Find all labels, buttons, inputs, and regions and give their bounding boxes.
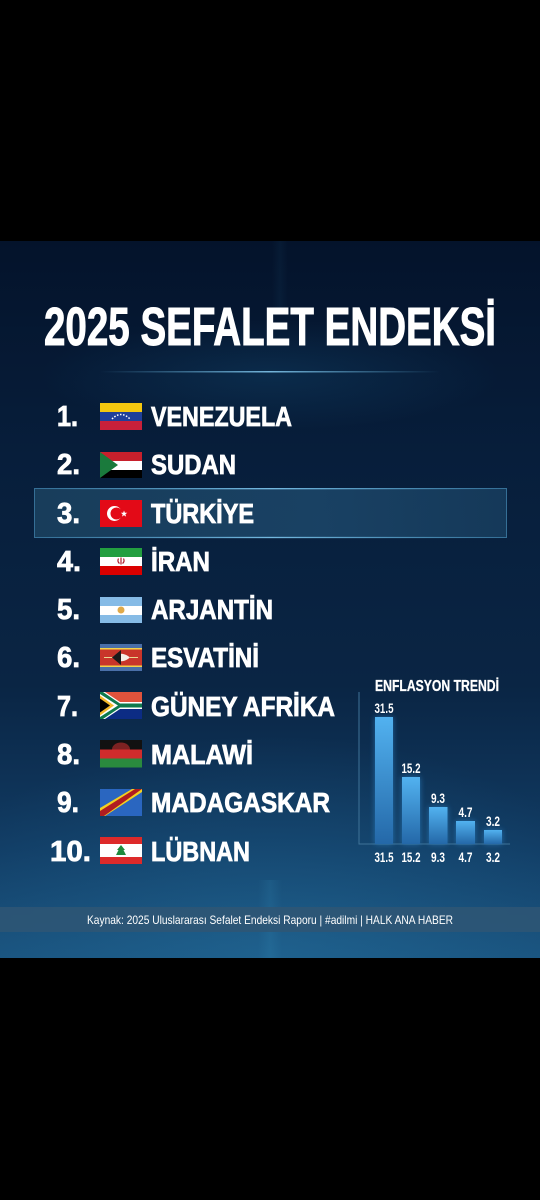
axis labels xyxy=(374,850,500,865)
flag: Güney Afrika xyxy=(100,692,142,719)
row 4: İran: 4. xyxy=(57,546,81,578)
row 5: Arjantin: 5. xyxy=(57,594,80,626)
flag: Sudan xyxy=(100,452,142,478)
row 8: Malawi: 8. xyxy=(57,739,80,771)
row 3: Türkiye: 3. xyxy=(57,498,80,530)
row 3: Türkiye xyxy=(57,498,254,530)
axis labels: 9.3 xyxy=(431,850,445,865)
row 2: Sudan: 2. xyxy=(57,449,80,481)
name: Arjantin: ARJANTİN xyxy=(151,594,273,625)
chart title: ENFLASYON TRENDİ xyxy=(375,677,499,695)
flag: Lübnan xyxy=(100,837,142,864)
bar value labels: 15.2 xyxy=(402,761,420,776)
bar value labels: 4.7 xyxy=(458,805,472,820)
flag: Madagaskar xyxy=(100,789,142,816)
row 5: Arjantin xyxy=(57,594,273,626)
flag: Esvatini xyxy=(100,644,142,671)
bar value labels: 9.3 xyxy=(431,791,445,806)
row 8: Malawi xyxy=(57,739,253,771)
name: Madagaskar: MADAGASKAR xyxy=(151,787,330,818)
highlight box: Türkiye row xyxy=(34,488,507,538)
bar value labels xyxy=(374,701,500,829)
flag: Türkiye xyxy=(100,500,142,527)
row 1: Venezuela xyxy=(57,401,292,433)
bars xyxy=(375,717,502,844)
row 2: Sudan xyxy=(57,449,236,481)
chart axes xyxy=(359,692,510,844)
axis labels: 15.2 xyxy=(402,850,420,865)
row 4: İran xyxy=(57,546,210,578)
row 10: Lübnan: 10. xyxy=(50,836,91,868)
row 10: Lübnan xyxy=(50,836,250,868)
name: Güney Afrika: GÜNEY AFRİKA xyxy=(151,691,335,722)
title underline glow xyxy=(100,371,440,372)
name: Lübnan: LÜBNAN xyxy=(151,836,250,867)
source bar: Kaynak: 2025 Uluslararası Sefalet Endeksi Raporu | #adilmi | HALK ANA HABER xyxy=(87,913,453,927)
name: Venezuela: VENEZUELA xyxy=(151,401,292,432)
name: İran: İRAN xyxy=(151,546,210,577)
flag: İran xyxy=(100,548,142,575)
row 7: Güney Afrika: 7. xyxy=(57,691,78,723)
row 6: Esvatini xyxy=(57,642,259,674)
row 9: Madagaskar: 9. xyxy=(57,787,79,819)
flag: Malawi xyxy=(100,740,142,768)
flag: Venezuela xyxy=(100,403,142,430)
axis labels: 31.5 xyxy=(374,850,394,865)
row 6: Esvatini: 6. xyxy=(57,642,80,674)
source bar xyxy=(0,907,540,932)
bars glow xyxy=(375,717,502,844)
name: Esvatini: ESVATİNİ xyxy=(151,642,259,673)
name: Malawi: MALAWİ xyxy=(151,739,253,770)
name: Sudan: SUDAN xyxy=(151,449,236,480)
row 9: Madagaskar xyxy=(57,787,330,819)
bar value labels: 31.5 xyxy=(374,701,394,716)
chart: Enflasyon Trendi xyxy=(359,677,510,865)
axis labels: 3.2 xyxy=(486,850,500,865)
name: Türkiye: TÜRKİYE xyxy=(151,498,254,529)
background panel xyxy=(0,241,540,958)
bar value labels: 3.2 xyxy=(486,814,500,829)
axis labels: 4.7 xyxy=(458,850,472,865)
row 7: Güney Afrika xyxy=(57,691,335,723)
row 1: Venezuela: 1. xyxy=(57,401,78,433)
flag: Arjantin xyxy=(100,597,142,623)
